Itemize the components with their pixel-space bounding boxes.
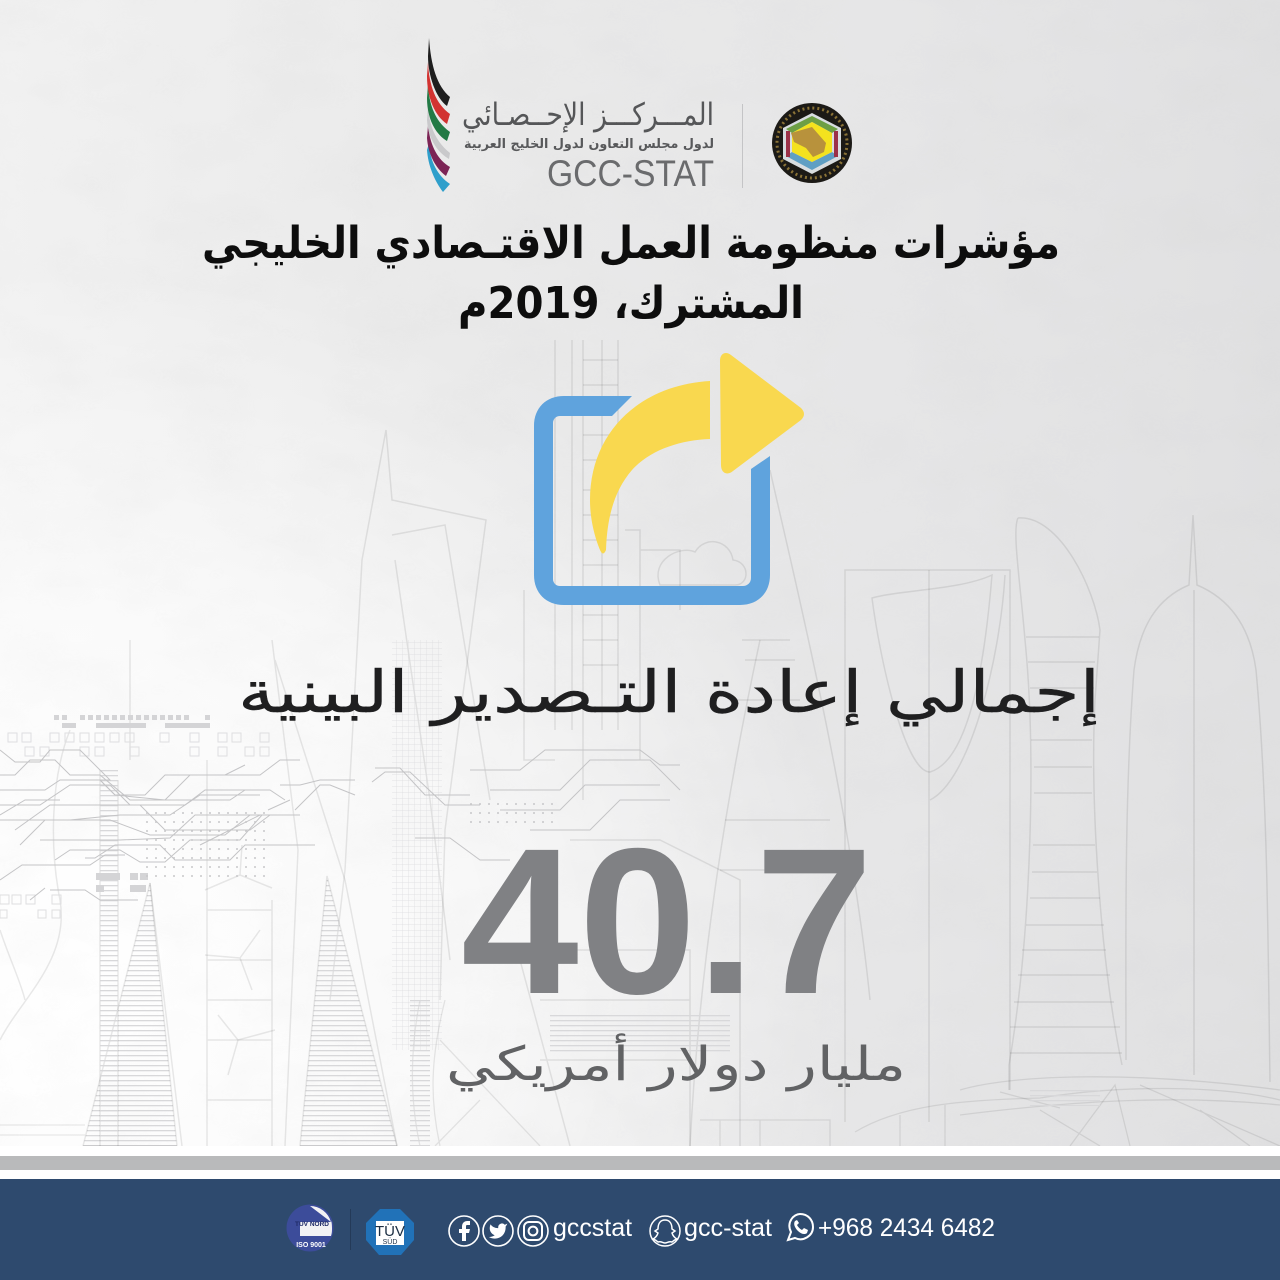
icon: facebook [449, 1216, 479, 1246]
harbour base [0, 1000, 1280, 1146]
icon: twitter [483, 1216, 513, 1246]
tower: frame and shield [845, 570, 1010, 1122]
icon: TUV SUD badge [366, 1209, 414, 1255]
heading: total intra-GCC re-exports: إجمالي إعادة التـصدير البينية [238, 658, 1100, 727]
footer bar [0, 1179, 1280, 1280]
chip squares [54, 715, 210, 892]
icon: re-export arrow [534, 353, 804, 605]
footer divider [350, 1209, 351, 1250]
handle: gcc-stat: gcc-stat [684, 1214, 772, 1242]
circuit board pattern [0, 715, 680, 918]
header logos [427, 38, 852, 194]
cloud [658, 542, 746, 585]
tower: sail left [83, 640, 182, 1146]
logo GCC-STAT: GCC-STAT [547, 153, 714, 194]
icon: GCC emblem [772, 103, 852, 183]
icon: TUV SUD badge: TÜV [375, 1222, 405, 1240]
tower: sail right [100, 640, 397, 1146]
tower: central ladder [524, 340, 680, 800]
icon: whatsapp [788, 1214, 813, 1240]
logo divider [742, 104, 743, 188]
icon: snapchat [650, 1216, 680, 1246]
unit label: مليار دولار أمريكي [446, 1033, 906, 1092]
icon: TUV Nord ISO badge: TUV NORD [295, 1221, 329, 1228]
logo ribbons [427, 38, 450, 192]
title line 1: مؤشرات منظومة العمل الاقتـصادي الخليجي [202, 218, 1060, 269]
icon: TUV Nord ISO badge: ISO 9001 [296, 1242, 326, 1249]
icon: TUV Nord ISO badge [286, 1204, 334, 1252]
handle: gccstat: gccstat [553, 1214, 632, 1242]
wind turbines [205, 845, 275, 1075]
icon: blue open square [534, 396, 770, 605]
icon: yellow arrow [590, 353, 804, 554]
tower: faceted left [330, 430, 490, 1050]
tower: banded curved [1009, 518, 1122, 1090]
separator bands [0, 1146, 1280, 1179]
icon: TUV SUD badge: SÜD [383, 1238, 397, 1246]
icon: instagram [518, 1216, 548, 1246]
big number: 40.7 [461, 806, 873, 1038]
logo Arabic name: المـــركـــز الإحــصـائي [462, 97, 714, 133]
curve lines left [0, 730, 70, 1040]
logo Arabic subtitle: لدول مجلس التعاون لدول الخليج العربية [464, 137, 714, 152]
tower: tapered spire center right [690, 470, 870, 1146]
tower: right dome [1126, 515, 1270, 1082]
phone number: +968 2434 6482 [818, 1214, 995, 1242]
tower: house block center [520, 840, 740, 1146]
title line 2: المشترك، 2019م [458, 278, 804, 329]
skyline illustration [0, 340, 1280, 1146]
title [202, 218, 1060, 329]
